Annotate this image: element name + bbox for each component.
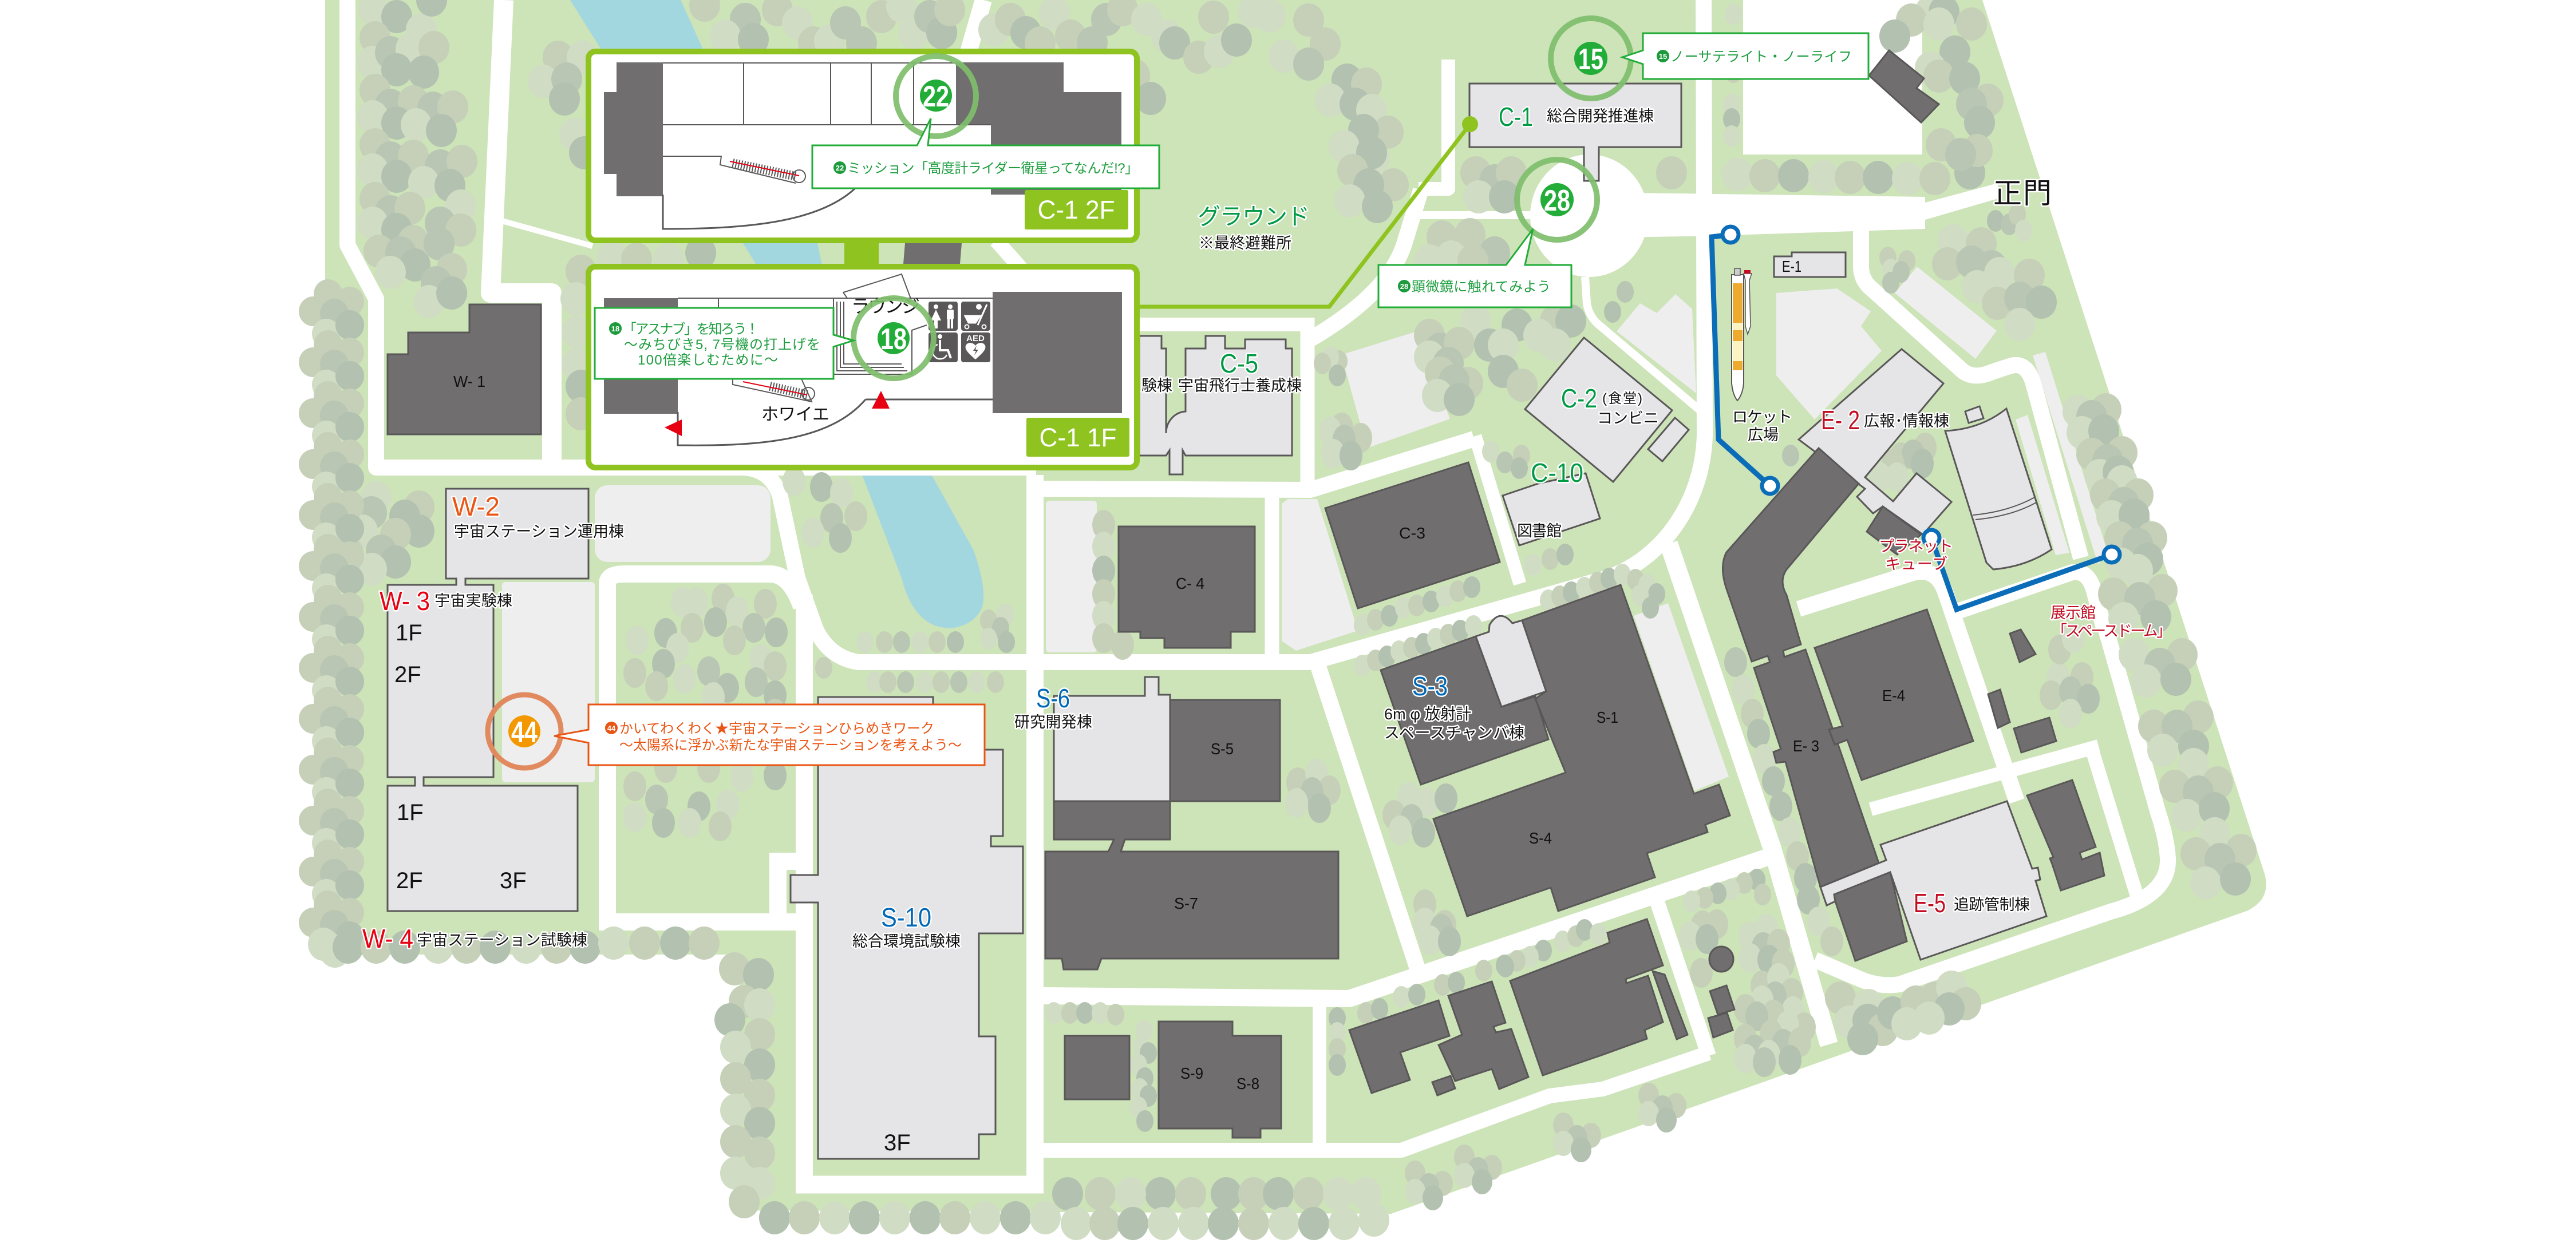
building: east annex xyxy=(2027,780,2104,890)
label: planet cube: キューブ xyxy=(1885,556,1947,573)
labels: dark building numbers xyxy=(1174,258,1905,1092)
building: C-5 xyxy=(1139,336,1292,474)
label: rocket plaza: ロケット xyxy=(1732,409,1792,426)
marker 28: 28 xyxy=(1544,184,1570,217)
building: C-10 xyxy=(1503,473,1600,545)
building: S-6 xyxy=(1054,677,1170,801)
marker 18: 18 xyxy=(880,323,907,356)
building: south block xyxy=(1065,1036,1129,1099)
label: main gate: 正門 xyxy=(1993,177,2052,209)
label: W-3 xyxy=(380,586,512,616)
label: floors: 1F xyxy=(396,620,422,646)
label: C-2: コンビニ xyxy=(1597,410,1659,427)
label: W-2: W-2 xyxy=(452,492,500,521)
trees: south rows xyxy=(308,927,1389,1240)
label: W-3: W- 3 xyxy=(380,586,430,616)
building: S-8, S-9 xyxy=(1159,1022,1281,1138)
marker 22: 22 xyxy=(923,80,949,113)
label: foyer: ホワイエ xyxy=(761,405,829,424)
arrow: entrance north xyxy=(872,391,890,409)
north white block xyxy=(1743,0,1922,155)
building: W-1 xyxy=(388,304,541,434)
labels: dark building numbers: S-8 xyxy=(1236,1075,1259,1092)
label: floors: 2F xyxy=(394,662,421,687)
label: S-10: 3F xyxy=(884,1130,911,1155)
callout 18 xyxy=(595,308,854,379)
label: planet cube: プラネット xyxy=(1879,538,1953,555)
callout 28 xyxy=(1378,229,1571,307)
building: S-1 and S-4 xyxy=(1433,585,1730,916)
marker 15 xyxy=(1551,18,1631,98)
label: W-4: 宇宙ステーション試験棟 xyxy=(417,932,587,949)
label: E-2: E- 2 xyxy=(1821,405,1860,435)
label: space dome: 展示館 xyxy=(2050,604,2096,621)
label: S-6 xyxy=(1014,683,1092,731)
pond xyxy=(570,0,983,628)
marker 44: 44 xyxy=(511,716,538,749)
label: S-6: S-6 xyxy=(1036,683,1070,713)
label: E-5: E-5 xyxy=(1914,888,1946,918)
trees: large xyxy=(333,0,2257,1055)
label: rocket plaza xyxy=(1732,409,1792,444)
labels: dark building numbers: E- 3 xyxy=(1793,737,1819,755)
label: C-10: C-10 xyxy=(1531,458,1583,488)
label: W-2 xyxy=(452,492,624,540)
labels: dark building numbers: C-3 xyxy=(1399,524,1425,542)
label: C-1 xyxy=(1499,102,1654,132)
building: E-3 xyxy=(1723,448,1879,887)
label: W-2: 宇宙ステーション運用棟 xyxy=(454,523,624,540)
callout 15: 15 xyxy=(1659,52,1667,61)
label: S-10: 総合環境試験棟 xyxy=(852,933,961,950)
label: ground: グラウンド xyxy=(1198,204,1310,229)
callout 18: 18 xyxy=(611,324,619,333)
label: S-3 xyxy=(1384,671,1524,742)
campus ground xyxy=(321,0,2266,1214)
label: C-2: (食堂) xyxy=(1602,391,1642,406)
callout 15 xyxy=(1622,33,1868,79)
marker 15: 15 xyxy=(1578,43,1603,76)
label: ground: ※最終避難所 xyxy=(1199,235,1291,252)
callout 28: 顕微鏡に触れてみよう xyxy=(1412,279,1551,295)
building: E-5 xyxy=(1820,801,2046,960)
label: C-5 xyxy=(1141,349,1302,394)
building: S-5 xyxy=(1170,700,1280,801)
building: E-3 south wing xyxy=(1833,872,1907,961)
callout 22: 22 xyxy=(836,164,844,172)
label: C-10: 図書館 xyxy=(1517,522,1562,540)
walking route blue lines xyxy=(1712,227,2120,609)
label: C-1 1F: C-1 1F xyxy=(1040,423,1116,452)
label: floors: 3F xyxy=(500,868,527,893)
building: C-2 xyxy=(1525,338,1672,482)
labels: dark building numbers: S-9 xyxy=(1180,1064,1203,1082)
label: E-5 xyxy=(1914,888,2030,918)
callout 44: 44 xyxy=(607,724,616,733)
callout 44 xyxy=(554,704,985,765)
panel: C-1 2F floor plan xyxy=(588,52,1137,267)
label: S-10 xyxy=(852,902,961,1155)
label: C-1 1F xyxy=(1026,418,1129,457)
buildings: south-centre group xyxy=(1349,919,1735,1095)
label: C-1 2F: C-1 2F xyxy=(1037,195,1115,224)
label: S-6: 研究開発棟 xyxy=(1014,714,1092,731)
label: space dome xyxy=(2050,604,2172,640)
buildings xyxy=(388,50,2104,1159)
callout 22: ミッション「高度計ライダー衛星ってなんだ!?」 xyxy=(847,161,1139,176)
label: W-1: W- 1 xyxy=(453,373,485,390)
label: C-2: C-2 xyxy=(1561,383,1597,413)
building labels xyxy=(362,102,2172,1155)
parking areas xyxy=(502,267,2108,791)
building: C-1 xyxy=(1469,84,1681,181)
label: rocket plaza: 広場 xyxy=(1748,426,1779,444)
labels: dark building numbers: E-1 xyxy=(1782,258,1801,275)
callout 28: 28 xyxy=(1400,282,1408,291)
label: C-5: C-5 xyxy=(1220,349,1258,378)
icon: AED: AED xyxy=(966,334,985,343)
label: E-2 xyxy=(1821,405,1949,435)
label: C-1: 総合開発推進棟 xyxy=(1547,108,1654,125)
building: space dome xyxy=(1945,406,2052,569)
building: C-3 xyxy=(1325,462,1500,608)
label: E-2: 広報･情報棟 xyxy=(1864,413,1949,430)
callout 22 xyxy=(812,118,1159,188)
arrow: entrance west xyxy=(665,419,682,436)
label: S-3: 6m φ 放射計 xyxy=(1384,706,1471,723)
label: C-10 xyxy=(1517,458,1583,540)
icon: stroller xyxy=(961,302,990,331)
labels: dark building numbers: S-5 xyxy=(1211,740,1234,758)
trees: small rows xyxy=(815,3,2032,1132)
building: north-east annex xyxy=(1869,50,1939,122)
road network xyxy=(347,0,2168,1193)
building: planet cube xyxy=(1867,506,1921,555)
trees: west column xyxy=(299,279,1686,1210)
callout 18: 100倍楽しむために〜 xyxy=(638,353,778,368)
label: ground xyxy=(1198,204,1310,252)
icon: restroom xyxy=(929,302,958,331)
label: S-3: S-3 xyxy=(1412,671,1448,701)
label: S-10: S-10 xyxy=(881,902,931,932)
label: E-5: 追跡管制棟 xyxy=(1954,896,2030,913)
rocket plaza rockets xyxy=(1732,268,1752,401)
labels: dark building numbers: S-4 xyxy=(1529,829,1552,847)
labels: dark building numbers: S-7 xyxy=(1174,894,1198,912)
label: W-4: W- 4 xyxy=(362,924,413,953)
label: space dome: 「スペースドーム」 xyxy=(2052,623,2172,640)
building: W-2, W-3, W-4 xyxy=(388,489,588,911)
marker 28 xyxy=(1517,160,1597,240)
connector line from C-1 to floor plans xyxy=(1139,116,1478,307)
labels: dark building numbers: E-4 xyxy=(1882,687,1905,704)
building: C-4 xyxy=(1119,526,1255,648)
label: S-3: スペースチャンバ棟 xyxy=(1384,724,1524,742)
marker 18 xyxy=(854,298,934,378)
panel: C-1 1F floor plan xyxy=(588,267,1137,468)
label: lounge: ラウンジ xyxy=(851,296,920,316)
buildings: small east blocks xyxy=(1988,630,2056,753)
building: S-7 xyxy=(1045,801,1338,969)
building: S-10 xyxy=(791,697,1023,1159)
building: E-2 xyxy=(1799,349,1951,535)
callout 18: 「アスナブ」を知ろう！ xyxy=(623,322,759,337)
marker 22 xyxy=(896,56,976,136)
labels: dark building numbers: S-1 xyxy=(1597,708,1618,726)
label: C-5: 宇宙飛行士養成棟 xyxy=(1178,377,1302,394)
label: C-1: C-1 xyxy=(1499,102,1533,132)
callout 44: かいてわくわく★宇宙ステーションひらめきワーク xyxy=(619,721,934,737)
building: C-2 annex xyxy=(1648,418,1689,461)
icon: AED xyxy=(961,332,990,362)
label: floors xyxy=(394,620,527,893)
building: E-4 xyxy=(1815,609,1973,780)
marker 44 xyxy=(488,695,561,768)
callout 15: ノーサテライト・ノーライフ xyxy=(1670,49,1852,65)
label: C-5: 験棟 xyxy=(1141,377,1172,394)
label: W-4 xyxy=(362,924,587,953)
icon: wheelchair xyxy=(929,332,958,362)
label: W-3: 宇宙実験棟 xyxy=(434,592,512,609)
label: floors: 2F xyxy=(396,868,423,893)
label: C-2 xyxy=(1561,383,1659,427)
label: C-1 2F xyxy=(1025,190,1128,229)
labels: dark building numbers: C- 4 xyxy=(1176,575,1204,592)
building: E-1 xyxy=(1774,252,1846,277)
building: S-3 xyxy=(1381,636,1548,785)
label: floors: 1F xyxy=(397,800,424,825)
label: planet cube xyxy=(1879,538,1953,573)
callout 18: 〜みちびき5, 7号機の打上げを xyxy=(624,337,820,353)
trees: medium xyxy=(623,413,2100,1077)
building: S-3 light wing xyxy=(1476,616,1546,707)
callout 44: 〜太陽系に浮かぶ新たな宇宙ステーションを考えよう〜 xyxy=(619,738,962,753)
